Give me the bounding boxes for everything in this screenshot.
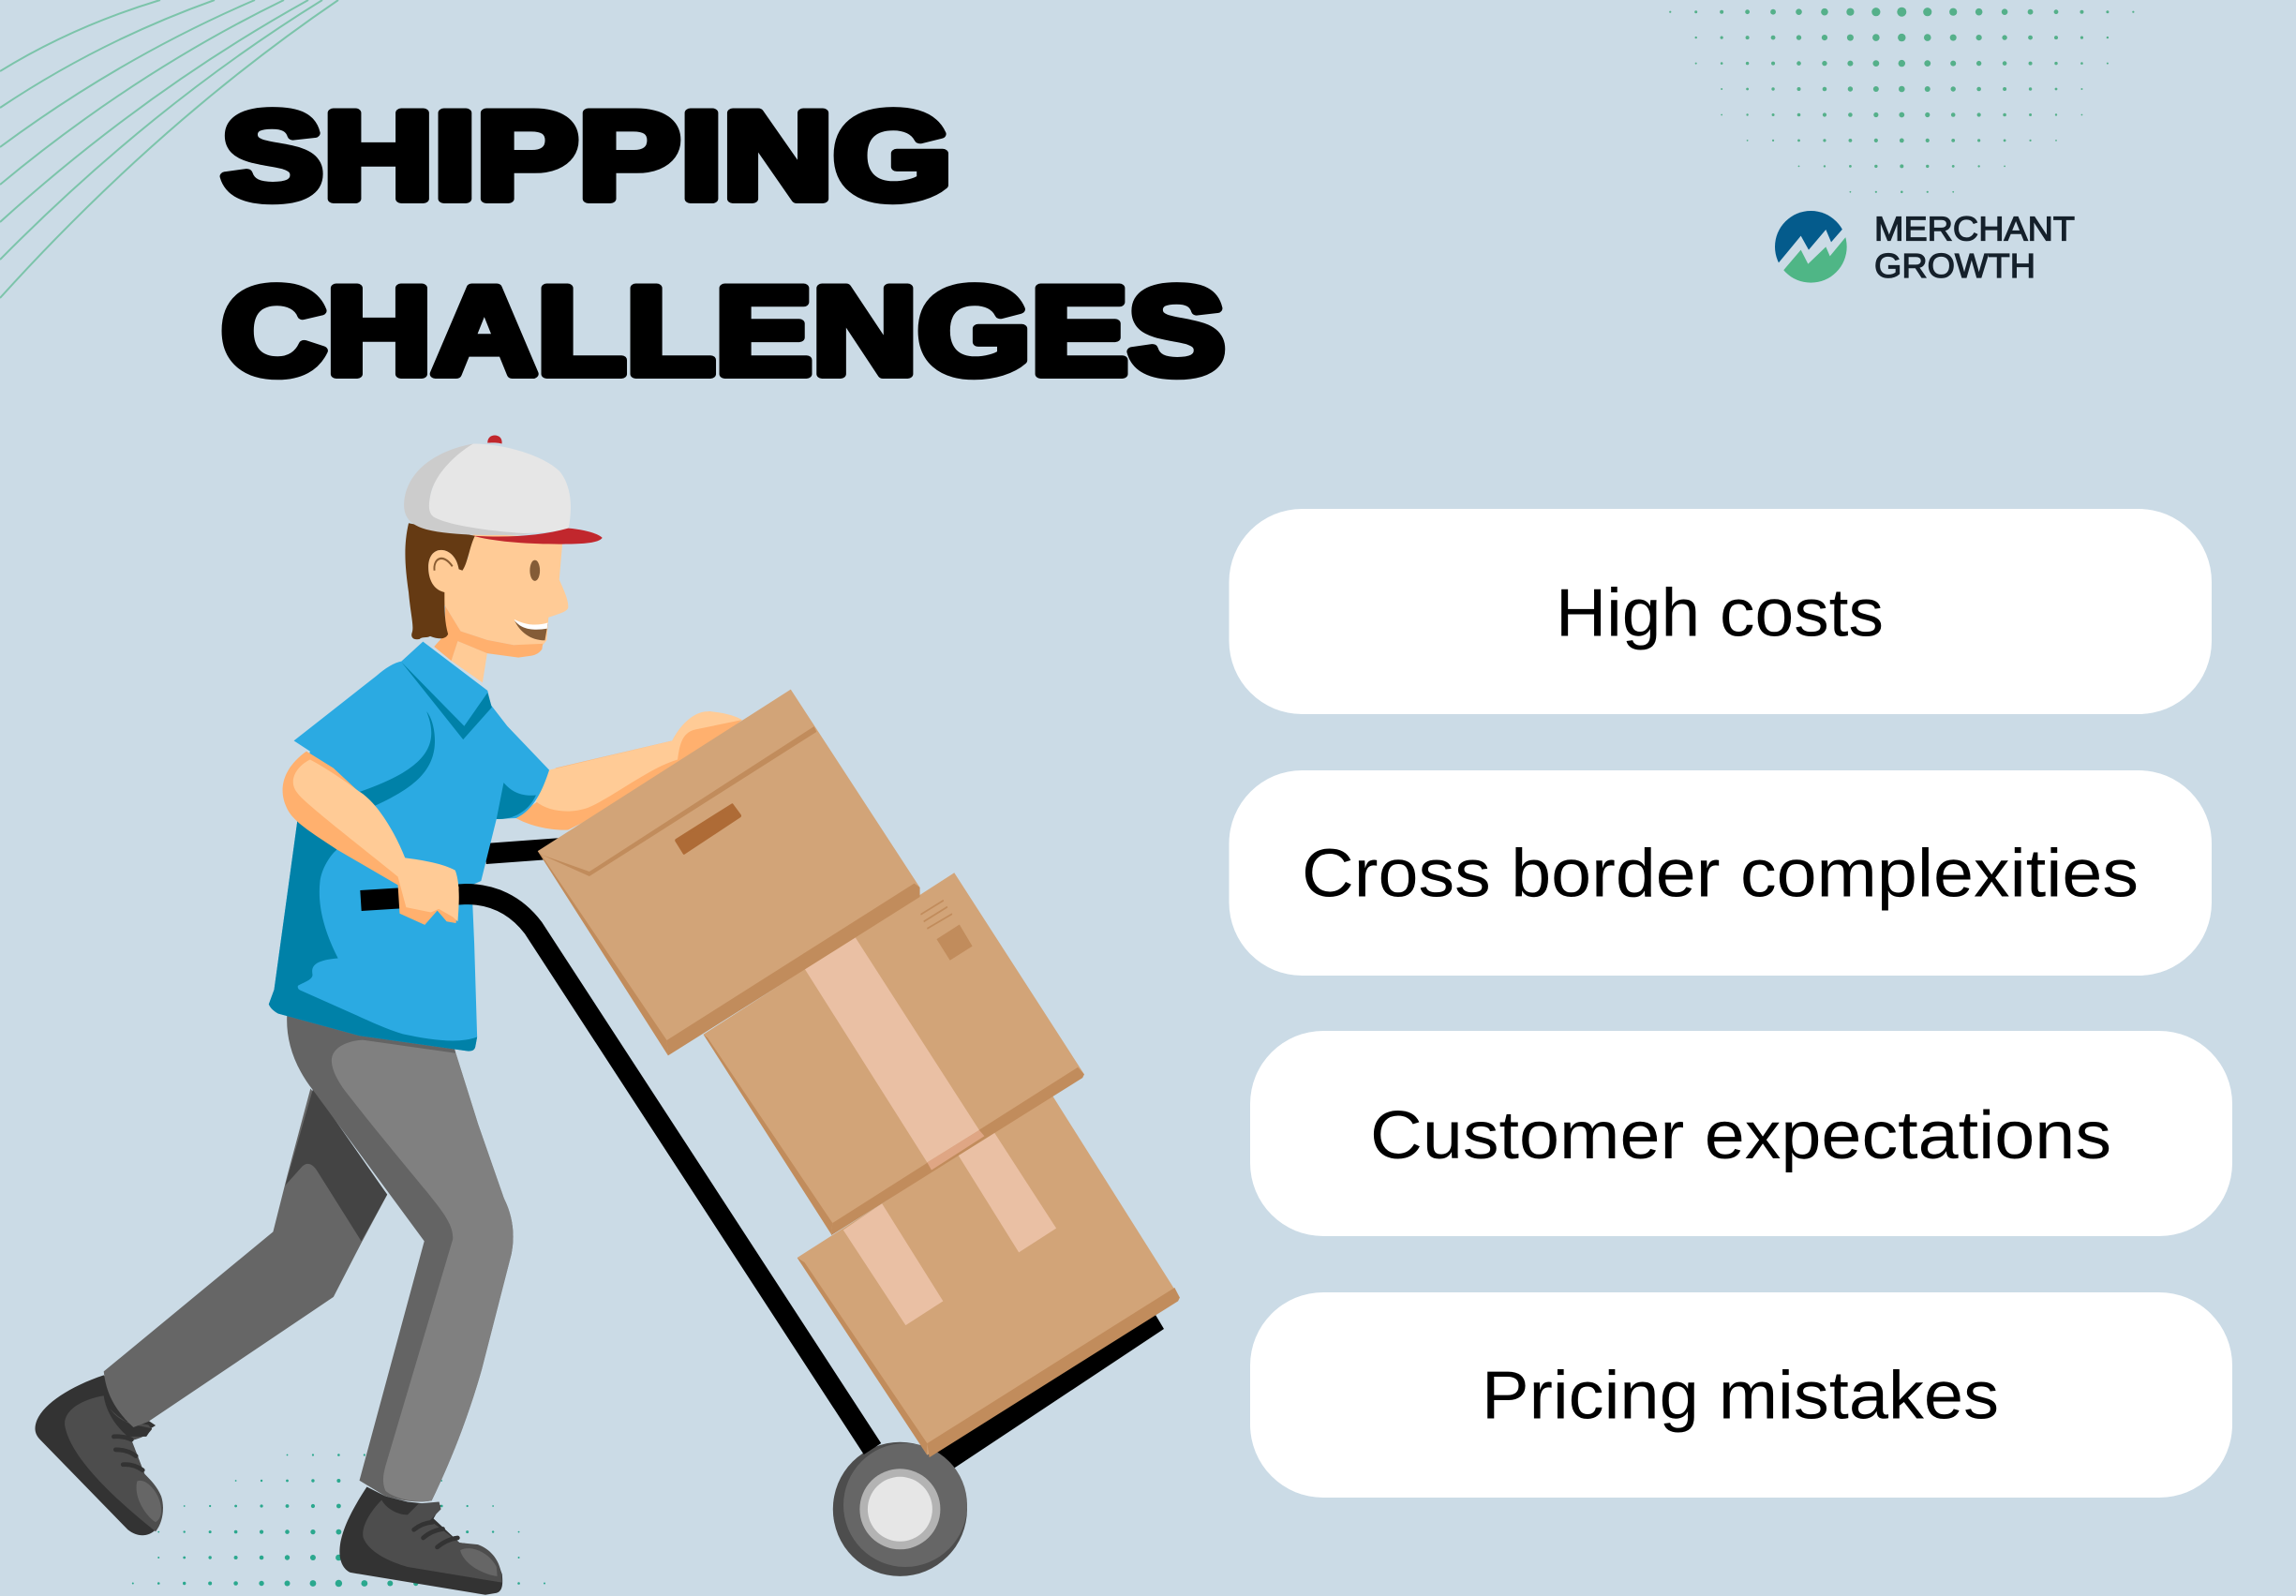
hair xyxy=(405,523,475,639)
title: CHALLENGES xyxy=(221,262,1226,401)
illustration: delivery man pushing hand truck xyxy=(35,436,1180,1595)
ear detail xyxy=(434,559,453,571)
back shoe xyxy=(35,1375,163,1535)
near arm and hand xyxy=(283,752,459,925)
icon: hand truck wheel xyxy=(833,1442,967,1576)
bottom box xyxy=(798,1095,1180,1457)
card: High costs xyxy=(1230,509,2212,714)
neck xyxy=(452,641,487,682)
cardboard boxes xyxy=(538,690,1180,1457)
hand truck frame and handle xyxy=(361,894,872,1449)
icon: logo mountain mark xyxy=(1775,211,1847,283)
logo wordmark: MERCHANT xyxy=(1874,210,2075,248)
card: Customer expectations: Customer expectations xyxy=(1370,1098,2111,1173)
smile xyxy=(514,619,548,640)
card: Pricing mistakes: Pricing mistakes xyxy=(1482,1359,1999,1434)
front shoe xyxy=(339,1487,502,1595)
eye xyxy=(529,560,540,581)
hand truck foot plate xyxy=(900,1315,1164,1490)
dot grid, top right xyxy=(1669,7,2134,193)
hand truck back handle xyxy=(485,848,562,854)
shirt xyxy=(269,642,549,1052)
back leg xyxy=(104,1088,387,1427)
top box xyxy=(538,690,920,1055)
cap xyxy=(404,436,603,544)
panel: challenge list xyxy=(1230,509,2232,1498)
front leg xyxy=(287,1012,514,1501)
title: SHIPPING xyxy=(221,87,952,226)
card: Pricing mistakes xyxy=(1250,1292,2232,1498)
card: Cross border complexities: Cross border complexities xyxy=(1302,836,2139,911)
dot grid, bottom left xyxy=(132,1454,545,1587)
card: Cross border complexities xyxy=(1230,770,2212,976)
logo wordmark: GROWTH xyxy=(1874,246,2035,285)
title xyxy=(221,87,1226,401)
head, neck, arms and torso xyxy=(269,436,742,1052)
middle box xyxy=(704,873,1084,1235)
far arm xyxy=(514,711,742,830)
card: High costs: High costs xyxy=(1556,575,1884,650)
card: Customer expectations xyxy=(1250,1031,2232,1236)
logo wordmark xyxy=(1874,210,2075,285)
decorative curved lines, top left xyxy=(0,0,338,298)
logo: Merchant Growth xyxy=(1775,211,2075,283)
face xyxy=(428,533,568,661)
